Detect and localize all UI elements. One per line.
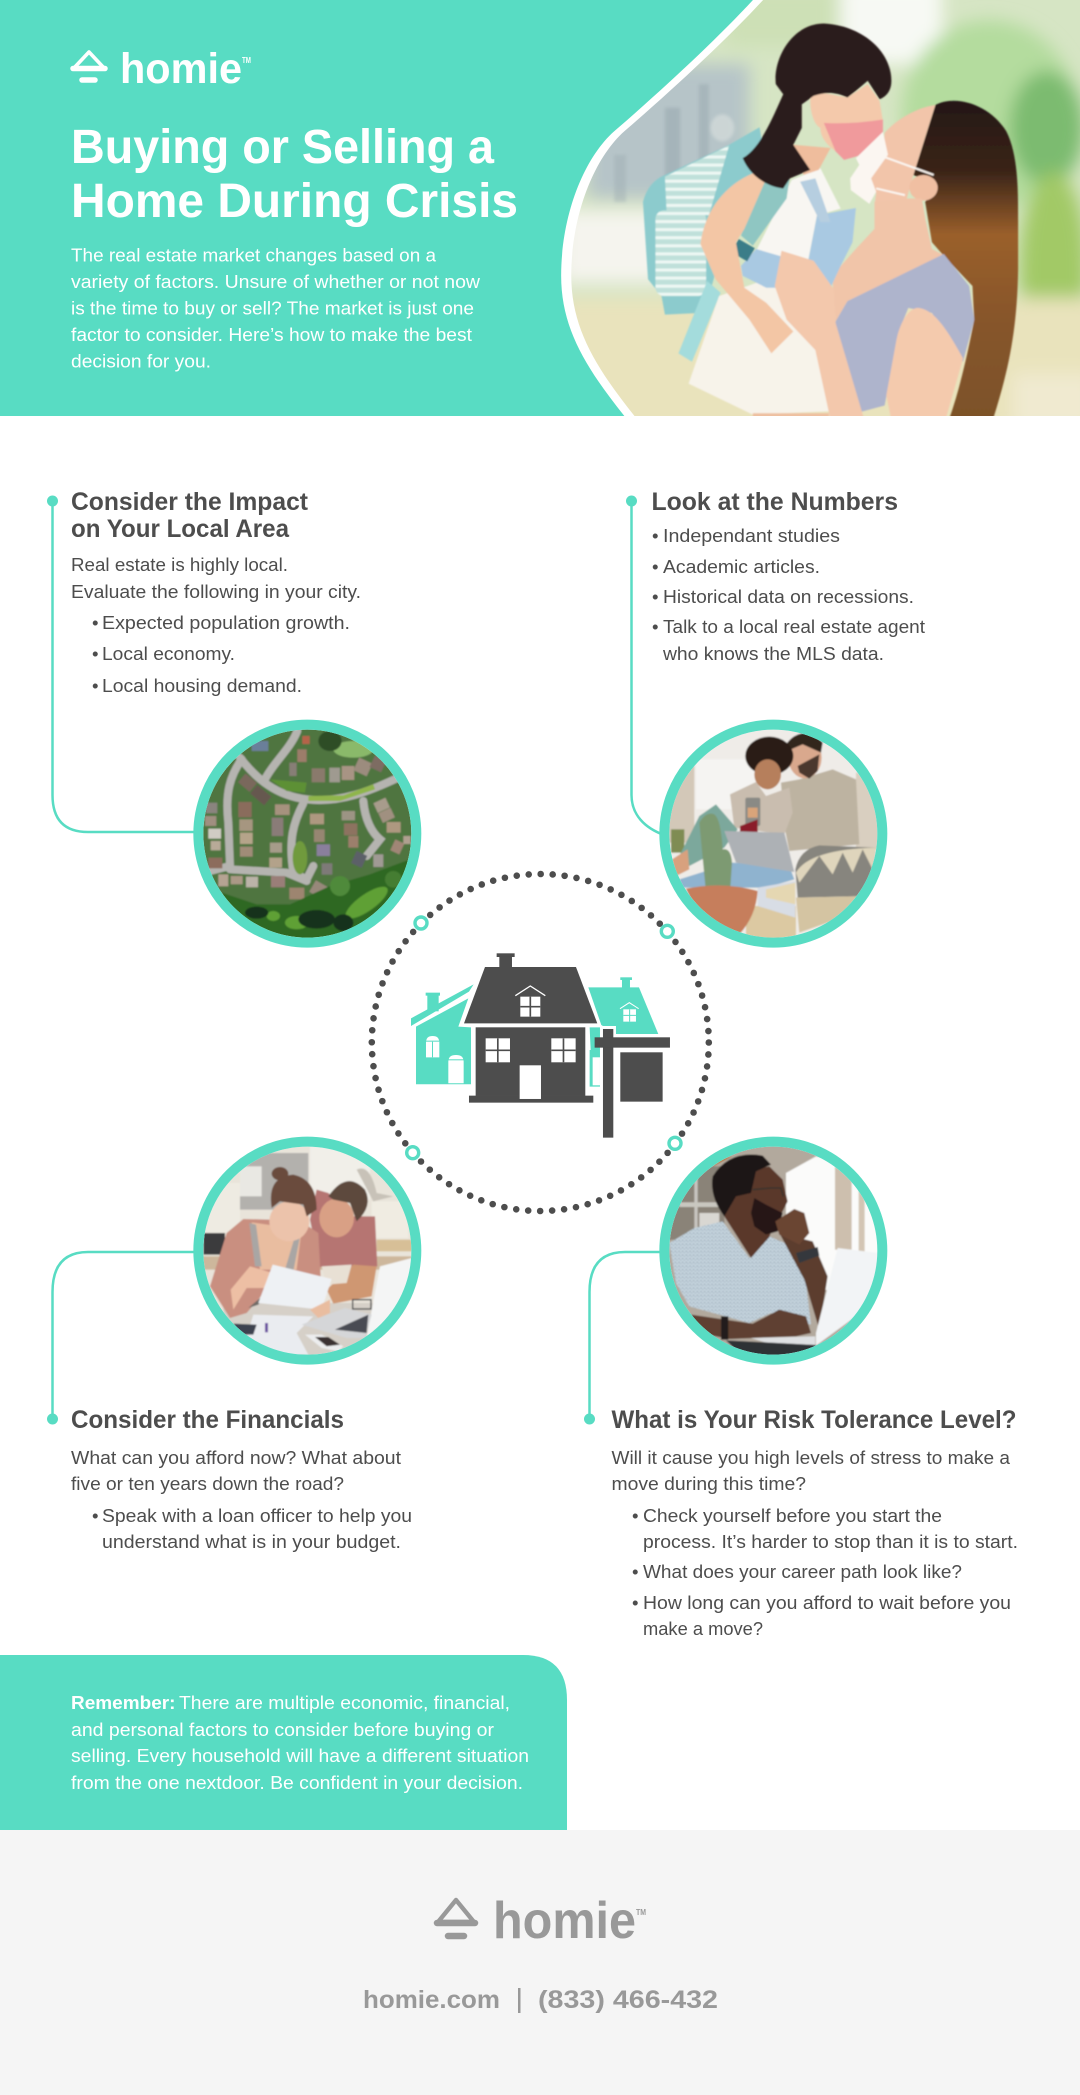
panel: local area text: Real estate is highly local. <box>71 554 288 575</box>
connector: financials <box>47 1252 200 1424</box>
panel: risk tolerance text: make a move? <box>643 1618 763 1639</box>
intro paragraph <box>71 244 481 372</box>
panel: financials text: understand what is in your budget. <box>102 1531 401 1552</box>
white curve edging <box>561 0 763 416</box>
panel: numbers text: • <box>652 525 659 546</box>
laptop <box>724 831 794 872</box>
callout: remember: from the one nextdoor. Be confident in your decision. <box>71 1772 523 1793</box>
panel: risk tolerance text: move during this time? <box>612 1473 806 1494</box>
background building columns <box>614 84 734 202</box>
panel: risk tolerance text: Will it cause you high levels of stress to make a <box>612 1447 1011 1468</box>
panel: numbers text: Historical data on recessions. <box>663 586 914 607</box>
lower arm <box>691 1310 811 1339</box>
mother long hair <box>913 101 1018 420</box>
title <box>71 121 518 228</box>
shirt <box>669 1221 811 1325</box>
connector: numbers <box>626 496 664 835</box>
panel: numbers text: • <box>652 586 659 607</box>
title: Home During Crisis <box>71 175 518 228</box>
heading: numbers: Look at the Numbers <box>652 488 898 516</box>
logo: homie white: homie <box>120 45 242 93</box>
callout: remember: selling. Every household will have a different situation <box>71 1745 529 1766</box>
child neck and face <box>793 145 831 175</box>
panel: risk tolerance text: process. It’s harder to stop than it is to start. <box>643 1531 1018 1552</box>
arm and hands <box>230 1266 270 1310</box>
heading: financials: Consider the Financials <box>71 1406 344 1434</box>
heading: local area: Consider the Impact <box>71 488 309 516</box>
panel: risk tolerance text <box>612 1406 1018 1639</box>
panel: financials text <box>71 1406 412 1552</box>
panel: local area text: • <box>92 643 99 664</box>
teal house left <box>411 984 474 1084</box>
panel: local area text: Expected population growth. <box>102 612 350 633</box>
backpack <box>643 127 766 315</box>
woman <box>210 1219 321 1318</box>
for-sale sign <box>595 1026 672 1140</box>
bottom papers <box>247 1315 313 1355</box>
contact line <box>363 1986 718 2014</box>
hero photo: mother and child wearing masks <box>571 0 1080 416</box>
panel: local area text <box>71 488 361 696</box>
woman top <box>730 782 793 834</box>
panel: local area text: Local economy. <box>102 643 235 664</box>
intro paragraph: decision for you. <box>71 350 211 372</box>
logo: homie white: TM <box>242 56 251 65</box>
mother face <box>871 105 935 205</box>
callout: remember: There are multiple economic, financial, <box>179 1692 510 1713</box>
logo: homie grey: TM <box>636 1907 646 1917</box>
panel: numbers text <box>652 488 926 664</box>
paper <box>258 1265 332 1310</box>
connector: local area <box>47 496 200 832</box>
panel: risk tolerance text: • <box>632 1561 639 1582</box>
table <box>223 1302 373 1354</box>
footer band <box>0 1830 1080 2095</box>
panel: numbers text: Academic articles. <box>663 556 820 577</box>
child top and overalls <box>756 168 841 264</box>
intro paragraph: is the time to buy or sell? The market is just one <box>71 298 474 318</box>
man head <box>788 743 822 779</box>
hero banner <box>0 0 1080 432</box>
contact line: (833) 466-432 <box>538 1986 718 2014</box>
panel: financials text: five or ten years down the road? <box>71 1473 344 1494</box>
arm and hand <box>779 1233 828 1330</box>
pot <box>686 885 758 934</box>
mother neck and chest <box>832 199 944 321</box>
photo circle: couple reviewing finances <box>198 1142 417 1360</box>
phone <box>305 1335 343 1351</box>
man beard <box>751 1198 783 1235</box>
icon: homie house mark grey <box>437 1900 475 1936</box>
teal panel <box>0 0 754 422</box>
mother arm <box>886 308 963 420</box>
photo circle: man thinking at laptop <box>664 1142 883 1360</box>
panel: financials text: What can you afford now? What about <box>71 1447 402 1468</box>
man hoodie <box>781 769 859 851</box>
child arm <box>700 173 793 353</box>
callout: remember <box>0 1655 567 1830</box>
panel: numbers text: Independant studies <box>663 525 840 546</box>
title: Buying or Selling a <box>71 121 494 174</box>
mother hand and forearm <box>775 251 864 420</box>
callout: remember: Remember: <box>71 1692 176 1713</box>
logo: homie grey: homie <box>493 1892 636 1950</box>
man hair <box>712 1155 771 1216</box>
panel: numbers text: • <box>652 556 659 577</box>
photo circle: couple on laptop <box>664 725 883 943</box>
man neck and face <box>724 1166 788 1258</box>
panel: local area text: • <box>92 612 99 633</box>
icon: houses and for-sale sign <box>411 953 672 1140</box>
mother dress <box>831 254 974 420</box>
heading: risk tolerance: What is Your Risk Tolerance Level? <box>612 1406 1016 1434</box>
child pink mask <box>824 119 883 160</box>
panel: financials text: • <box>92 1505 99 1526</box>
cactus <box>699 814 732 893</box>
laptop <box>816 1248 879 1346</box>
intro paragraph: The real estate market changes based on a <box>71 244 437 266</box>
teal house right <box>588 977 658 1087</box>
blanket <box>795 845 876 898</box>
child hair and ponytail <box>743 24 891 188</box>
woman head <box>745 737 793 775</box>
panel: risk tolerance text: What does your career path look like? <box>643 1561 962 1582</box>
photo circle: aerial neighbourhood <box>198 725 417 949</box>
panel: risk tolerance text: • <box>632 1592 639 1613</box>
laptop <box>367 1258 412 1337</box>
panel: financials text: Speak with a loan officer to help you <box>102 1505 412 1526</box>
icon: homie house mark <box>73 52 105 80</box>
callout: remember: and personal factors to consider before buying or <box>71 1719 494 1740</box>
panel: risk tolerance text: • <box>632 1505 639 1526</box>
child skirt <box>689 279 831 415</box>
heading: local area: on Your Local Area <box>71 515 290 543</box>
panel: risk tolerance text: How long can you afford to wait before you <box>643 1592 1011 1613</box>
panel: risk tolerance text: Check yourself before you start the <box>643 1505 942 1526</box>
backpack strap <box>740 178 790 246</box>
connector: risk tolerance <box>584 1252 664 1424</box>
panel: numbers text: who knows the MLS data. <box>662 643 884 664</box>
panel: local area text: • <box>92 675 99 696</box>
contact line: homie.com <box>363 1986 500 2014</box>
intro paragraph: factor to consider. Here’s how to make the best <box>71 324 473 345</box>
panel: local area text: Evaluate the following in your city. <box>71 581 361 602</box>
man <box>310 1190 377 1267</box>
panel: local area text: Local housing demand. <box>102 675 302 696</box>
heading: local area <box>71 488 309 543</box>
panel: numbers text: • <box>652 616 659 637</box>
dotted ring <box>372 874 709 1211</box>
panel: numbers text: Talk to a local real estate agent <box>663 616 926 637</box>
main dark house <box>464 953 597 1103</box>
intro paragraph: variety of factors. Unsure of whether or not now <box>71 271 481 292</box>
mother white mask <box>850 132 888 204</box>
legs and cup <box>679 804 738 866</box>
floor and books <box>746 906 796 939</box>
